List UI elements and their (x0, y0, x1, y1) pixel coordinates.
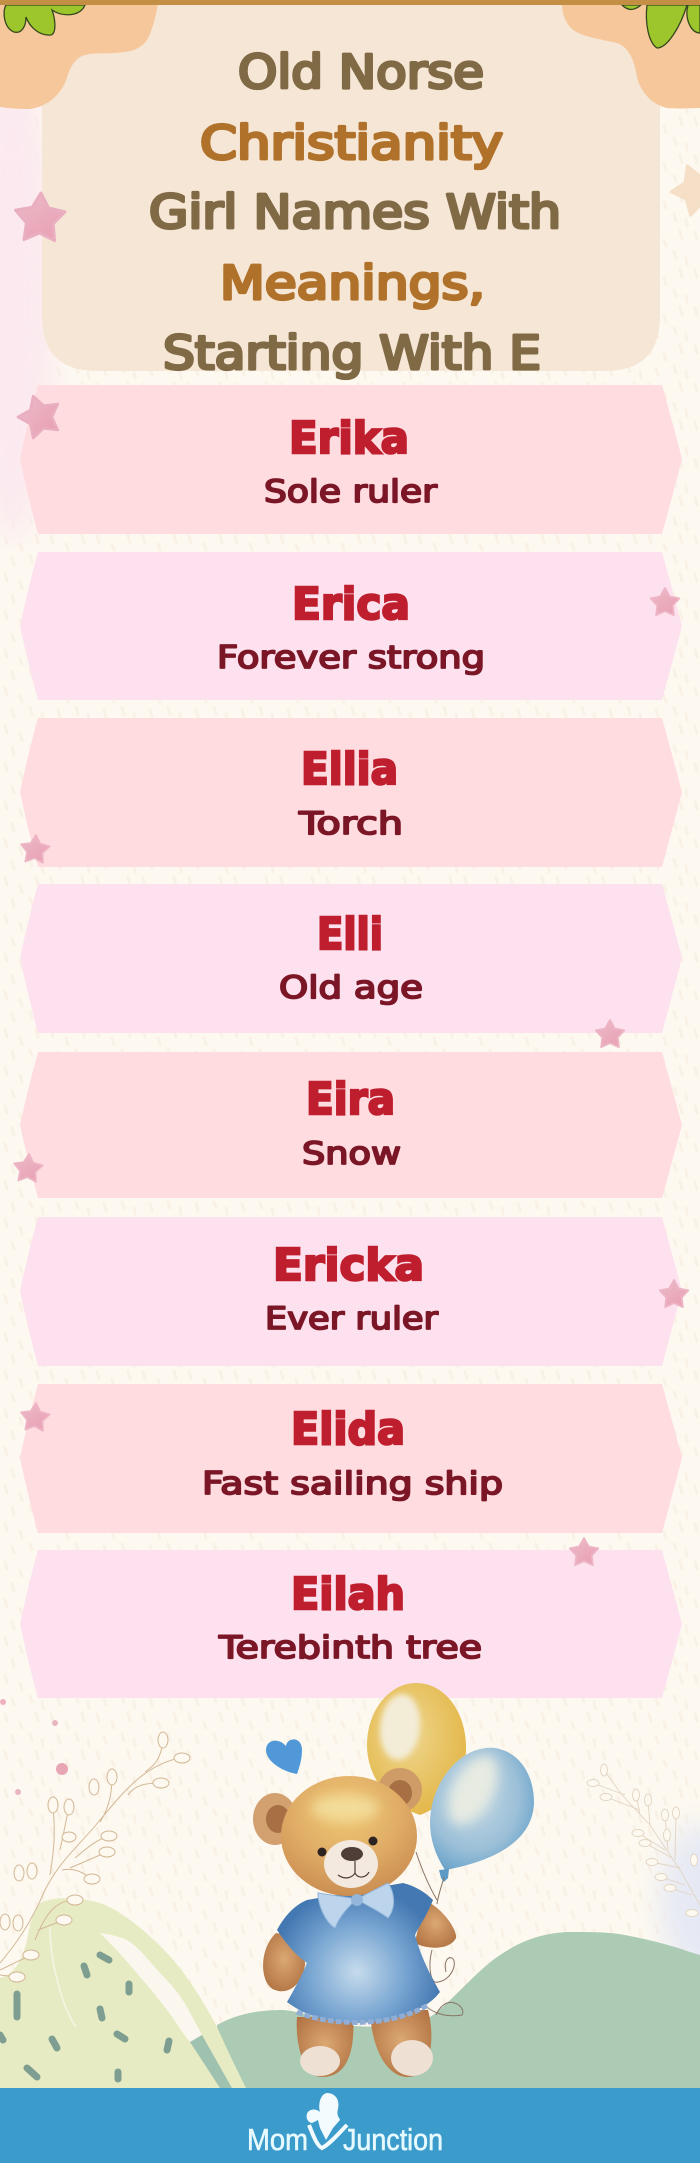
hill: pale green with dashes (0, 1898, 247, 2090)
bear dress lace hem (297, 2005, 428, 2022)
panel: Ericka (20, 1217, 682, 1366)
panel: Ellia: Torch (298, 806, 403, 842)
logo: MomJunction: Mom (247, 2122, 308, 2157)
balloon strings (416, 1852, 463, 2016)
panel: Eira: Snow (302, 1136, 401, 1172)
title: Christianity (200, 116, 503, 170)
panel: Ellia: Ellia (301, 744, 398, 795)
title: Old Norse (238, 45, 484, 99)
small stars along panels (10, 586, 690, 1569)
panel: Elida: Elida (291, 1404, 405, 1455)
bear ears (253, 1793, 297, 1845)
bear dress (277, 1883, 440, 2023)
footer bar (0, 2088, 700, 2163)
bear head (281, 1776, 417, 1896)
panel: Ericka: Ericka (273, 1240, 424, 1291)
title: Meanings, (220, 256, 485, 310)
panel: Erica: Forever strong (217, 640, 485, 676)
top bar (0, 0, 700, 5)
bear muzzle (324, 1840, 378, 1888)
star: upper left (10, 189, 68, 247)
decorative top-right corner blob (562, 4, 700, 108)
panel: Elli: Old age (279, 970, 423, 1006)
bear legs (297, 2017, 353, 2077)
panel: Ellia (20, 718, 682, 867)
panel: Eira (20, 1052, 682, 1198)
star: on Erika panel (15, 393, 62, 440)
bear eyes (318, 1848, 326, 1856)
logo: MomJunction: Junction (343, 2122, 443, 2157)
bear nose and mouth (341, 1847, 363, 1861)
pink dots (0, 1699, 68, 1795)
title (149, 45, 561, 380)
icon: top-right leaves (622, 5, 700, 48)
decorative top-left corner blob (0, 4, 158, 109)
hill: sage green (217, 1932, 700, 2090)
title: Starting With E (163, 326, 541, 380)
panel: Ericka: Ever ruler (265, 1301, 438, 1337)
panel: Erika: Sole ruler (264, 474, 437, 510)
title: Girl Names With (149, 185, 561, 239)
bear foot pads (300, 2046, 340, 2076)
logo: MomJunction (247, 2093, 443, 2157)
star: beige right (667, 160, 700, 218)
icon: blue balloon (430, 1747, 534, 1882)
illustration: teddy bear (253, 1768, 456, 2077)
title panel (42, 5, 660, 371)
panel: Erica: Erica (292, 579, 410, 630)
bear bow (318, 1883, 394, 1928)
panel: Eilah: Eilah (291, 1569, 405, 1620)
left branch with buds (0, 1732, 190, 1982)
icon: yellow balloon (367, 1683, 466, 1815)
icon: top-left leaves (4, 5, 85, 35)
panel: Elida (20, 1384, 682, 1533)
panel: Erika: Erika (289, 413, 409, 464)
panel: Elli (20, 884, 682, 1033)
panel: Eilah: Terebinth tree (218, 1630, 482, 1666)
panel: Eira: Eira (306, 1074, 395, 1125)
panel: Elli: Elli (317, 909, 383, 960)
panel: Elida: Fast sailing ship (202, 1466, 503, 1502)
icon: blue heart (266, 1739, 302, 1774)
panel: Eilah (20, 1550, 682, 1698)
panel: Erica (20, 552, 682, 700)
right branch with buds (587, 1764, 700, 1916)
bear right arm (415, 1903, 456, 1948)
panel: Erika (20, 385, 682, 534)
bear left arm (263, 1933, 305, 1991)
